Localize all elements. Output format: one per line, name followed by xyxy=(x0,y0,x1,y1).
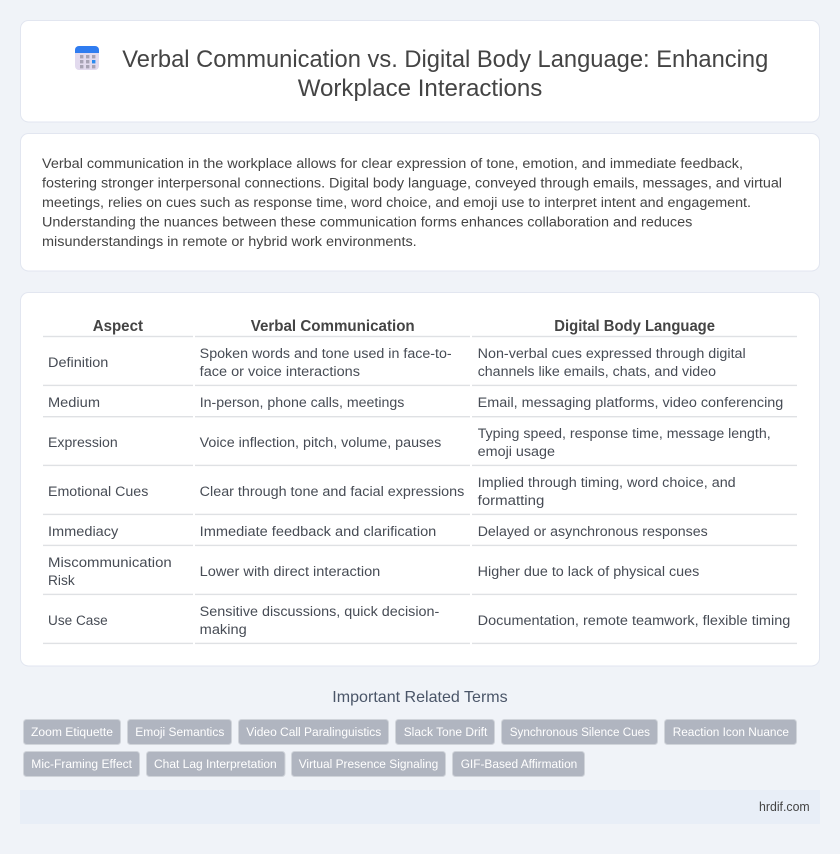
text block: summary: Understanding the nuances between these communication forms enhances collaboration and reduces xyxy=(42,215,692,231)
table row: definition: face or voice interactions xyxy=(200,364,360,380)
panel: comparison table xyxy=(20,292,820,666)
table header row xyxy=(43,318,797,337)
tag: Emoji Semantics xyxy=(135,725,224,739)
table row: immediacy: Immediate feedback and clarification xyxy=(200,524,436,540)
text block: summary: meetings, relies on cues such as response time, word choice, and emoji use to interpret intent and engagement. xyxy=(42,195,751,211)
tag: Slack Tone Drift xyxy=(404,725,488,739)
table row: definition: Spoken words and tone used in face-to- xyxy=(200,346,452,362)
table header row: Aspect xyxy=(93,318,144,335)
table row: definition xyxy=(43,346,797,386)
table row: immediacy: Immediacy xyxy=(48,524,119,540)
table row: expression: emoji usage xyxy=(478,444,555,460)
text block: summary: fostering stronger interpersonal connections. Digital body language, conveyed through emails, messages, and virtual xyxy=(42,176,782,192)
tag xyxy=(396,720,494,744)
tag: Zoom Etiquette xyxy=(31,725,113,739)
title: Verbal Communication vs. Digital Body Language: Enhancing xyxy=(122,46,768,73)
table row: use case: Use Case xyxy=(48,613,108,629)
panel: header xyxy=(20,20,820,122)
title: Workplace Interactions xyxy=(298,75,542,102)
table row: immediacy xyxy=(43,524,797,546)
table row: expression: Expression xyxy=(48,435,118,451)
text block: summary: Verbal communication in the workplace allows for clear expression of tone, emotion, and immediate feedback, xyxy=(42,156,743,172)
tag: Reaction Icon Nuance xyxy=(673,725,789,739)
tag xyxy=(24,720,120,744)
tag xyxy=(128,720,232,744)
icon: calendar xyxy=(75,46,99,70)
table row: medium: Email, messaging platforms, video conferencing xyxy=(478,395,783,411)
table row: definition: Definition xyxy=(48,355,108,371)
table row: emotional cues: Clear through tone and facial expressions xyxy=(200,484,464,500)
tag: Virtual Presence Signaling xyxy=(299,757,438,771)
table row: use case: Sensitive discussions, quick decision- xyxy=(200,604,440,620)
table row: emotional cues xyxy=(43,475,797,515)
tag: GIF-Based Affirmation xyxy=(461,757,577,771)
footer xyxy=(20,790,820,824)
tag xyxy=(664,720,796,744)
tag xyxy=(146,752,285,776)
table row: expression xyxy=(43,426,797,466)
tag: Chat Lag Interpretation xyxy=(154,757,277,771)
table header row: Digital Body Language xyxy=(554,318,715,335)
title xyxy=(122,46,768,102)
table row: miscommunication risk xyxy=(43,555,797,595)
table header row: Verbal Communication xyxy=(251,318,415,335)
tag xyxy=(292,752,446,776)
tag list: related terms xyxy=(24,720,796,776)
table row: emotional cues: Implied through timing, word choice, and xyxy=(478,475,736,491)
tag xyxy=(238,720,388,744)
table row: expression: Voice inflection, pitch, volume, pauses xyxy=(200,435,441,451)
panel: summary paragraph xyxy=(20,134,820,271)
text block: summary: misunderstandings in remote or hybrid work environments. xyxy=(42,234,417,250)
table row: definition: channels like emails, chats, and video xyxy=(478,364,716,380)
footer: hrdif.com xyxy=(759,800,810,814)
tag xyxy=(452,752,584,776)
table row: immediacy: Delayed or asynchronous responses xyxy=(478,524,708,540)
table row: emotional cues: formatting xyxy=(478,493,544,509)
table row: miscommunication risk: Lower with direct interaction xyxy=(200,564,380,580)
table row: medium: Medium xyxy=(48,395,100,411)
tag: Video Call Paralinguistics xyxy=(246,725,381,739)
tag: Synchronous Silence Cues xyxy=(510,725,650,739)
table row: miscommunication risk: Risk xyxy=(48,573,76,589)
tag xyxy=(502,720,658,744)
table row: medium: In-person, phone calls, meetings xyxy=(200,395,404,411)
table row: use case: Documentation, remote teamwork, flexible timing xyxy=(478,613,790,629)
table row: definition: Non-verbal cues expressed through digital xyxy=(478,346,746,362)
tag: Mic-Framing Effect xyxy=(31,757,133,771)
table row: use case: making xyxy=(200,622,247,638)
table row: miscommunication risk: Miscommunication xyxy=(48,555,172,571)
table row: miscommunication risk: Higher due to lack of physical cues xyxy=(478,564,699,580)
heading: important related terms: Important Related Terms xyxy=(332,689,508,706)
tag xyxy=(24,752,140,776)
table row: expression: Typing speed, response time, message length, xyxy=(478,426,771,442)
table row: medium xyxy=(43,395,797,417)
table row: use case xyxy=(43,604,797,644)
text block: summary xyxy=(42,156,782,250)
table row: emotional cues: Emotional Cues xyxy=(48,484,148,500)
